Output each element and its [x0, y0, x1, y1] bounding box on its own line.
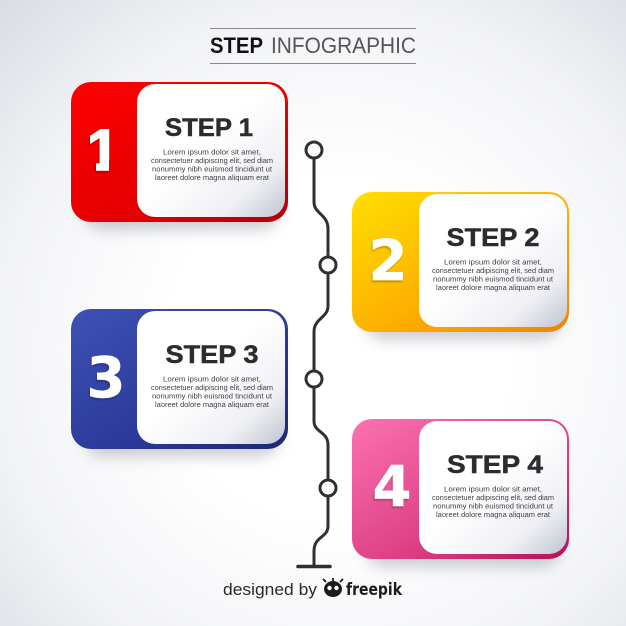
panel: step 2: nonummy nibh euismod tincidunt ut — [433, 274, 554, 284]
panel: step 1 — [71, 82, 288, 230]
title — [210, 28, 416, 64]
panel: step 3: consectetuer adipiscing elit, sed diam — [151, 383, 273, 392]
panel: step 2: consectetuer adipiscing elit, sed diam — [432, 266, 554, 275]
panel: step 2: 2 — [369, 229, 407, 294]
panel: step 4: consectetuer adipiscing elit, sed diam — [432, 493, 554, 502]
panel: step 4 — [352, 419, 569, 567]
panel: step 3: Lorem ipsum dolor sit amet, — [163, 374, 261, 384]
panel: step 1: consectetuer adipiscing elit, sed diam — [151, 156, 273, 165]
panel: step 2: STEP 2 — [446, 224, 540, 252]
panel: step 2: laoreet dolore magna aliquam erat — [436, 283, 551, 292]
panel: step 1: laoreet dolore magna aliquam erat — [155, 173, 270, 182]
panel: step 1: nonummy nibh euismod tincidunt ut — [152, 164, 273, 174]
footer credit: designed by — [223, 580, 318, 599]
panel: step 4: 4 — [373, 455, 411, 520]
title: INFOGRAPHIC — [271, 33, 416, 58]
panel: step 4: laoreet dolore magna aliquam erat — [436, 510, 551, 519]
panel: step 4: STEP 4 — [447, 451, 543, 479]
panel: step 4: nonummy nibh euismod tincidunt ut — [433, 502, 554, 510]
panel: step 1: STEP 1 — [165, 114, 253, 142]
panel: step 1: Lorem ipsum dolor sit amet, — [163, 148, 261, 156]
timeline connector — [298, 142, 336, 566]
footer credit — [223, 578, 403, 600]
panel: step 3 — [71, 309, 288, 457]
panel: step 3: laoreet dolore magna aliquam erat — [155, 400, 270, 409]
panel: step 3: STEP 3 — [166, 341, 258, 369]
title: STEP — [210, 33, 263, 58]
panel: step 3: 3 — [87, 346, 125, 411]
panel: step 1: 1 — [87, 118, 119, 183]
panel: step 4: Lorem ipsum dolor sit amet, — [444, 484, 542, 494]
panel: step 2: Lorem ipsum dolor sit amet, — [444, 258, 542, 266]
panel: step 3: nonummy nibh euismod tincidunt ut — [152, 392, 273, 400]
footer credit: freepik — [346, 580, 403, 600]
panel: step 2 — [352, 192, 569, 340]
icon: freepik logo — [323, 578, 343, 597]
